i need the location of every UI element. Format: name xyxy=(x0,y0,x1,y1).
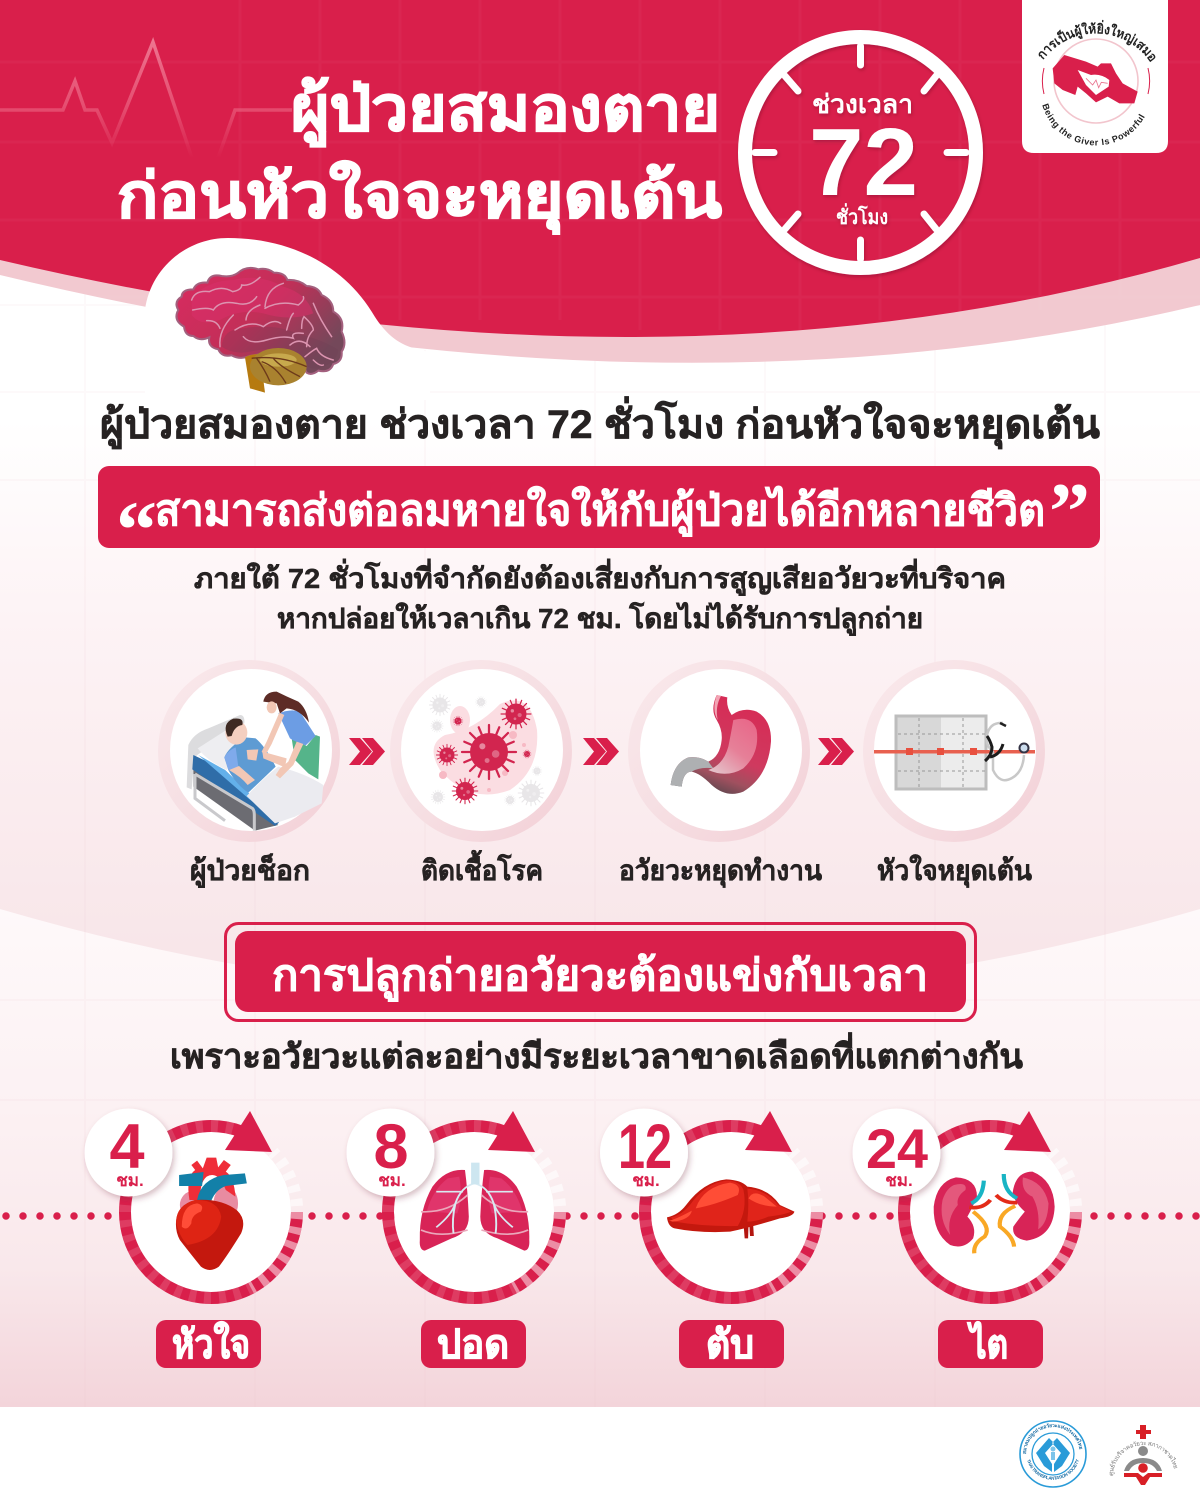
white hump behind brain xyxy=(145,238,430,400)
pink wave under header xyxy=(0,240,1200,363)
dotted timeline xyxy=(6,1212,1200,1220)
step 2 circle: infection xyxy=(390,660,572,842)
section banner: การปลูกถ่ายอวัยวะต้องแข่งกับเวลา xyxy=(272,952,928,1002)
hour badge: 12 xyxy=(600,1108,688,1196)
clock badge: 72 hours xyxy=(745,37,976,268)
heading: patient brain death: ผู้ป่วยสมองตาย ช่วงเวลา 72 ชั่วโมง ก่อนหัวใจจะหยุดเต้น xyxy=(100,396,1100,450)
hour badge: 4: 4 xyxy=(109,1112,145,1182)
step labels xyxy=(190,849,1032,888)
hour badge: 24 xyxy=(852,1108,940,1196)
organ label: liver xyxy=(679,1320,784,1368)
title: ผู้ป่วยสมองตาย xyxy=(291,75,720,147)
arrow: step 2 to 3 xyxy=(583,738,619,765)
section banner xyxy=(226,924,976,1020)
organ label: liver: ตับ xyxy=(706,1323,754,1367)
icon: brain xyxy=(176,268,344,393)
organ label: lungs: ปอด xyxy=(437,1323,509,1367)
organ label: heart: หัวใจ xyxy=(172,1321,250,1367)
step 3 circle: organ failure xyxy=(628,660,810,842)
title: ก่อนหัวใจจะหยุดเต้น xyxy=(117,160,722,234)
footer white strip xyxy=(0,1407,1200,1500)
logo: Being the Giver Is Powerful: การเป็นผู้ให้ยิ่งใหญ่เสมอ xyxy=(1038,20,1156,62)
description text: ภายใต้ 72 ชั่วโมงที่จำกัดยังต้องเสี่ยงกับการสูญเสียอวัยวะที่บริจาค xyxy=(194,558,1006,596)
organ: liver xyxy=(600,1108,817,1298)
step 1 circle: patient in shock xyxy=(158,660,340,842)
hour badge: 4 xyxy=(84,1108,172,1196)
organ label: kidney: ไต xyxy=(967,1321,1008,1367)
hour badge: 8: 8 xyxy=(373,1112,409,1182)
step 4 circle: cardiac arrest xyxy=(863,660,1045,842)
hour badge: 4: ชม. xyxy=(116,1171,144,1190)
arrow: step 3 to 4 xyxy=(818,738,854,765)
page background upper xyxy=(0,0,1200,1000)
logo: Thai Transplantation Society: สมาคมปลูกถ่ายอวัยวะแห่งประเทศไทย xyxy=(1023,1423,1082,1454)
hour badge: 24: 24 xyxy=(866,1117,928,1180)
quote banner: สามารถส่งต่อลมหายใจให้กับผู้ป่วยได้อีกหลายชีวิต xyxy=(155,485,1045,537)
arrow: step 1 to 2 xyxy=(349,738,385,765)
step labels: อวัยวะหยุดทำงาน xyxy=(619,855,822,888)
logo: Organ Donation Center Thai Red Cross xyxy=(1110,1425,1178,1485)
organ: heart xyxy=(84,1108,297,1298)
organ label: kidney xyxy=(938,1320,1043,1368)
hour badge: 12: 12 xyxy=(618,1112,672,1182)
clock badge: 72 hours: ช่วงเวลา xyxy=(812,89,913,119)
hour badge: 8 xyxy=(346,1108,434,1196)
clock badge: 72 hours: ชั่วโมง xyxy=(836,202,888,229)
section subheading: เพราะอวัยวะแต่ละอย่างมีระยะเวลาขาดเลือดที่แตกต่างกัน xyxy=(170,1032,1023,1076)
logo: Organ Donation Center Thai Red Cross: ศูนย์รับบริจาคอวัยวะ สภากาชาดไทย xyxy=(1110,1441,1178,1476)
quote banner: ” xyxy=(1049,466,1090,557)
quote banner: “ xyxy=(116,484,157,575)
step labels: ติดเชื้อโรค xyxy=(421,849,543,886)
hour badge: 12: ชม. xyxy=(632,1171,660,1190)
clock badge: 72 hours: 72 xyxy=(809,109,918,216)
organ label: lungs xyxy=(421,1320,526,1368)
header red band xyxy=(0,0,1200,337)
organ: lungs xyxy=(346,1108,560,1298)
description text xyxy=(194,558,1006,636)
logo: Being the Giver Is Powerful: Being the Giver Is Powerful xyxy=(1042,103,1145,146)
description text: หากปล่อยให้เวลาเกิน 72 ชม. โดยไม่ได้รับการปลูกถ่าย xyxy=(277,601,923,636)
logo: Being the Giver Is Powerful xyxy=(1022,0,1168,153)
quote banner xyxy=(98,466,1100,575)
step labels: หัวใจหยุดเต้น xyxy=(877,854,1032,888)
hour badge: 24: ชม. xyxy=(885,1171,913,1190)
hour badge: 8: ชม. xyxy=(378,1171,406,1190)
organ: kidneys xyxy=(852,1108,1076,1298)
title xyxy=(117,75,722,234)
step labels: ผู้ป่วยช็อก xyxy=(190,853,310,888)
logo: Thai Transplantation Society: THAI TRANSPLANTATION SOCIETY xyxy=(1027,1459,1079,1480)
page background lower xyxy=(0,909,1200,1407)
ECG heartbeat line xyxy=(0,42,292,158)
logo: Thai Transplantation Society xyxy=(1019,1420,1087,1488)
